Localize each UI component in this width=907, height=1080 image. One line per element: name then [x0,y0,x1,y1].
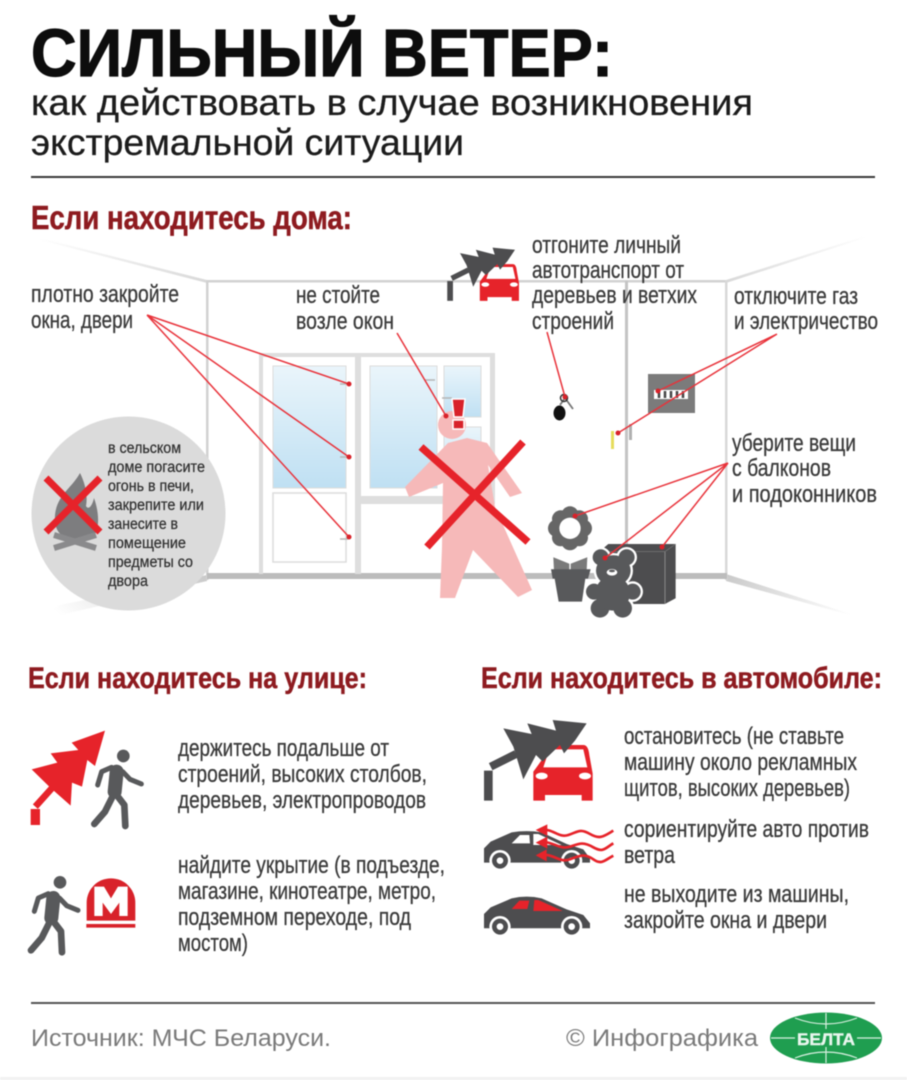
title: СИЛЬНЫЙ ВЕТЕР: [31,15,613,91]
red cross over person [421,442,528,547]
text: stop the car [624,723,857,802]
heading: on the street: Если находитесь на улице: [28,662,367,695]
text: stay in the car [624,881,849,934]
label: gas and electricity: отключите газ [734,283,858,310]
source: Источник: МЧС Беларуси. [31,1025,331,1052]
icon: fallen tree and car [484,720,593,801]
text: rural advice: в сельском [108,440,181,457]
icon: electric panel [648,374,695,413]
subtitle: как действовать в случае возникновения [31,82,753,123]
text: orient the car [624,816,869,869]
label: balconies: с балконов [732,455,831,482]
text: stay in the car: закройте окна и двери [624,907,827,934]
label: move car: отгоните личный [532,232,681,259]
text: find shelter: подземном переходе, под [178,904,411,931]
text: keep away from buildings [178,735,427,814]
window [259,353,495,574]
icon: teddy bear [586,549,641,618]
icon: crossed campfire [46,473,100,548]
label: balconies: и подоконников [732,481,877,508]
icon: car against wind [484,824,613,871]
label: close windows: окна, двери [31,307,133,334]
icon: exclamation mark [452,399,465,429]
text: rural advice: предметы со [108,554,193,571]
icon: gas valve [611,431,614,449]
text: rural advice: двора [108,573,148,590]
icon: flower pot [548,506,592,602]
icon: fallen tree and car (small) [447,248,519,301]
label: not near windows: возле окон [296,308,394,335]
text: find shelter: найдите укрытие (в подъезде, [178,852,445,879]
icon: walking person [94,750,141,826]
label: balconies [732,430,877,508]
icon: box [599,544,676,604]
subtitle: экстремальной ситуации [31,122,464,163]
icon: walking person 2 [31,876,78,952]
person near window [405,411,532,598]
heading: at home: Если находитесь дома: [31,199,352,236]
text: find shelter: мостом) [178,930,248,957]
label: move car: автотранспорт от [532,257,684,284]
text: rural advice [108,440,205,590]
text: stay in the car: не выходите из машины, [624,881,849,908]
text: keep away from buildings: деревьев, электропроводов [178,787,426,814]
room illustration [30,236,875,622]
credit: © Инфографика [566,1025,759,1052]
text: rural advice: помещение [108,535,186,552]
logo: BELTA: БЕЛТА [797,1030,855,1049]
icon: car with closed windows [484,897,590,937]
label: move car [532,232,697,335]
text: keep away from buildings: держитесь подальше от [178,735,389,762]
logo: BELTA [770,1012,882,1064]
text: rural advice: занесите в [108,516,178,533]
text: rural advice: доме погасите [108,459,205,476]
text: rural advice: закрепите или [108,497,204,514]
panel: rural house circle [32,416,226,610]
label: move car: деревьев и ветхих [532,282,697,309]
text: rural advice: огонь в печи, [108,478,194,495]
text: find shelter: магазине, кинотеатре, метро, [178,878,436,905]
icon: metro [86,878,135,928]
text: orient the car: ветра [624,842,675,869]
label: not near windows: не стойте [296,282,380,309]
callout lines: home [147,315,777,560]
icon: falling red tree [31,731,105,825]
subtitle [31,82,753,163]
label: balconies: уберите вещи [732,430,856,457]
label: not near windows [296,282,394,335]
text: stop the car: остановитесь (не ставьте [624,723,844,750]
label: gas and electricity [734,283,878,335]
text: find shelter [178,852,445,957]
label: move car: строений [532,308,614,335]
icon: car keys [554,394,573,420]
label: close windows [31,281,179,334]
text: keep away from buildings: строений, высоких столбов, [178,761,427,788]
label: close windows: плотно закройте [31,281,179,308]
